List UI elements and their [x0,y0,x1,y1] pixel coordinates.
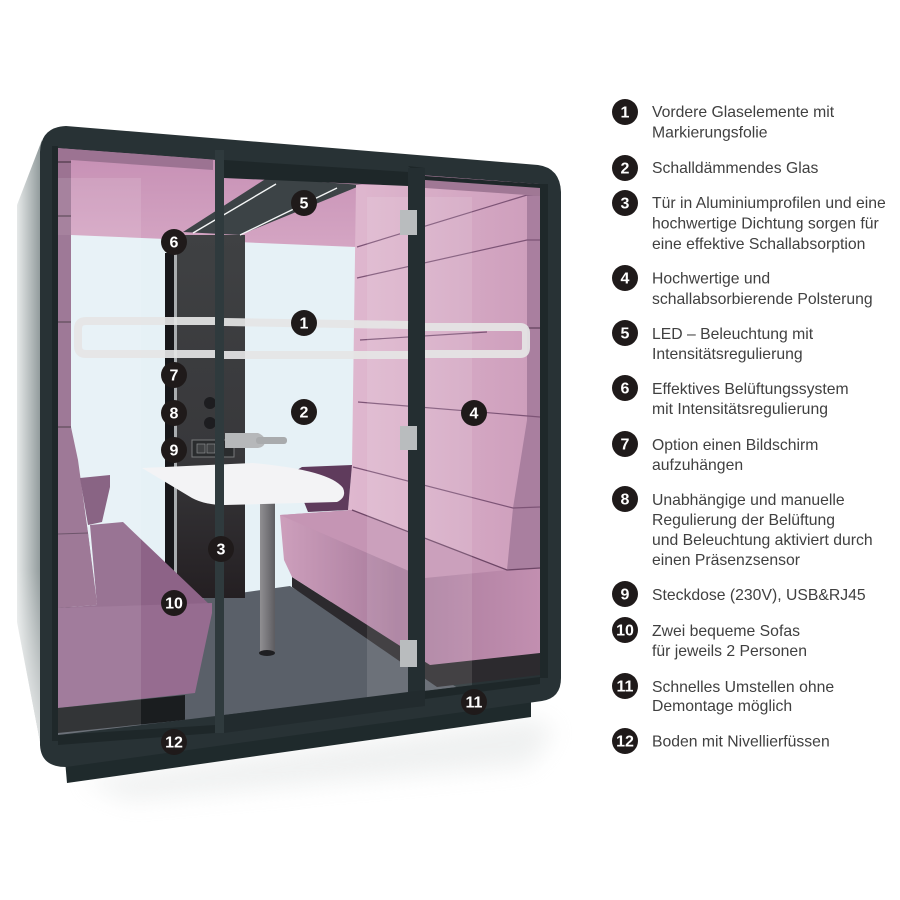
legend item 12: 12 [616,734,634,750]
marker 5: 5 [300,196,309,212]
marker 10 [161,590,187,616]
legend item 5: LED – Beleuchtung mit [652,326,814,343]
legend item 10: für jeweils 2 Personen [652,643,807,660]
rear column [165,235,245,600]
ceiling LED panel [183,178,362,235]
legend item 6: mit Intensitätsregulierung [652,401,828,418]
marker 4 [461,400,487,426]
legend item 2 [612,155,818,181]
marker 3: 3 [217,542,226,558]
legend item 6: Effektives Belüftungssystem [652,381,849,398]
marker 4: 4 [470,406,479,422]
legend item 11: 11 [617,678,634,696]
ceiling [58,148,538,247]
legend item 10 [612,617,807,660]
marker 1: 1 [300,316,309,332]
legend item 9: Steckdose (230V), USB&RJ45 [652,587,866,604]
legend item 4: 4 [621,270,630,288]
marker 11 [461,689,487,715]
cabin outer frame [40,126,561,767]
right sofa [280,465,540,687]
legend item 8: einen Präsenzsensor [652,552,800,569]
legend item 4: schallabsorbierende Polsterung [652,291,873,308]
marker 12 [161,729,187,755]
legend item 7: aufzuhängen [652,457,743,474]
legend [612,99,886,754]
legend item 3: eine effektive Schallabsorption [652,236,865,253]
frosted marking film [78,321,526,355]
back window [71,235,356,620]
cabin side panel [17,140,42,752]
marker 8 [161,400,187,426]
legend item 8: Unabhängige und manuelle [652,492,845,509]
left sofa [58,450,212,733]
legend item 5: 5 [621,326,630,342]
marker 7: 7 [170,368,179,384]
legend item 9 [612,581,866,607]
marker 5 [291,190,317,216]
legend item 6: 6 [621,380,630,398]
right wall upholstery [348,185,540,570]
marker 2: 2 [300,404,309,422]
legend item 8: und Beleuchtung aktiviert durch [652,532,873,549]
marker 1 [291,310,317,336]
marker 6 [161,229,187,255]
legend item 3: hochwertige Dichtung sorgen für [652,216,879,232]
legend item 2: Schalldämmendes Glas [652,160,818,177]
marker 9 [161,437,187,463]
legend item 5 [612,320,814,363]
legend item 11: Schnelles Umstellen ohne [652,679,834,696]
legend item 8: 8 [621,492,630,508]
legend item 10: 10 [616,622,634,640]
legend item 4 [612,265,873,308]
marker 12: 12 [165,734,183,752]
legend item 5: Intensitätsregulierung [652,346,803,363]
marker 6: 6 [170,234,179,252]
legend item 12: Boden mit Nivellierfüssen [652,734,830,750]
legend item 1: 1 [621,104,630,122]
legend item 12 [612,728,830,754]
marker 8: 8 [170,406,179,422]
legend item 9: 9 [621,586,630,604]
legend item 11 [612,673,834,715]
legend item 3 [612,190,886,253]
legend item 4: Hochwertige und [652,270,770,288]
marker 11: 11 [466,694,483,712]
door handle [225,433,287,448]
table leg [259,500,275,656]
marker 7 [161,362,187,388]
marker 9: 9 [170,442,179,460]
legend item 7: Option einen Bildschirm [652,437,818,454]
legend item 1 [612,99,835,142]
marker 3 [208,536,234,562]
marker 10: 10 [165,596,183,612]
door and panel frames [52,146,548,745]
legend item 7: 7 [621,436,630,454]
legend item 8: Regulierung der Belüftung [652,512,835,529]
legend item 7 [612,431,818,474]
legend item 3: Tür in Aluminiumprofilen und eine [652,195,886,212]
cabin illustration [17,126,561,800]
interior [58,148,560,750]
table top [142,463,344,505]
legend item 2: 2 [621,160,630,178]
legend item 1: Vordere Glaselemente mit [652,104,835,121]
cabin base [65,695,531,783]
floor [58,586,456,735]
legend item 10: Zwei bequeme Sofas [652,623,800,640]
glass reflections [58,178,472,738]
legend item 6 [612,375,849,418]
legend item 3: 3 [621,196,630,212]
floor shadow [80,718,555,800]
legend item 8 [612,486,873,569]
left wall upholstery [58,148,540,608]
door hinges [400,210,417,667]
marker 2 [291,399,317,425]
legend item 11: Demontage möglich [652,698,792,715]
legend item 1: Markierungsfolie [652,124,768,142]
